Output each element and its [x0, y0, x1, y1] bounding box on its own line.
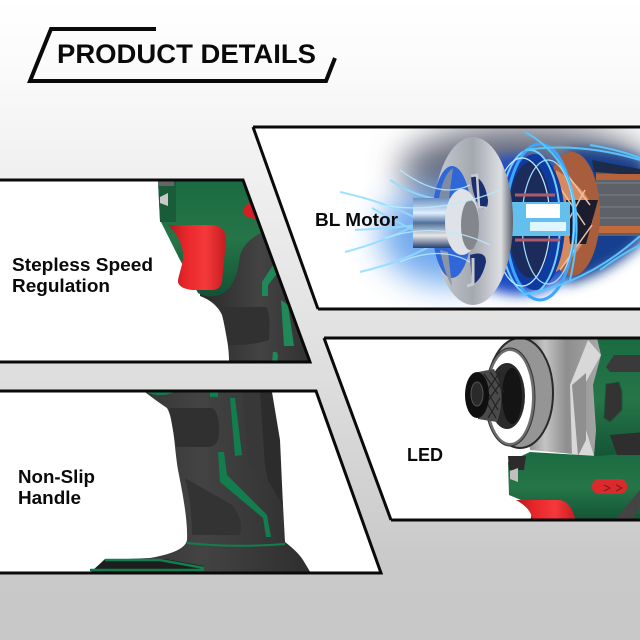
panel: BL motor — [253, 125, 640, 309]
panel: LED — [324, 336, 640, 523]
panel: stepless speed regulation — [0, 180, 320, 370]
label: stepless speed regulation: Regulation — [12, 276, 110, 296]
motor disc — [433, 137, 513, 305]
label: BL motor: BL Motor — [315, 210, 398, 230]
label: non-slip handle: Non-Slip — [18, 467, 95, 487]
label: LED: LED — [407, 445, 443, 465]
drill head photo — [465, 336, 640, 523]
panel: non-slip handle — [0, 391, 381, 575]
motor shaft — [413, 198, 452, 248]
heading: product details — [30, 29, 335, 81]
label: non-slip handle: Handle — [18, 488, 81, 508]
label: non-slip handle — [18, 467, 95, 508]
label: stepless speed regulation: Stepless Speed — [12, 255, 153, 275]
drill grip and trigger photo — [158, 182, 308, 360]
motor photo — [340, 125, 640, 305]
label: stepless speed regulation — [12, 255, 153, 296]
drill handle photo — [87, 391, 312, 575]
heading: product details: PRODUCT DETAILS — [57, 39, 316, 69]
